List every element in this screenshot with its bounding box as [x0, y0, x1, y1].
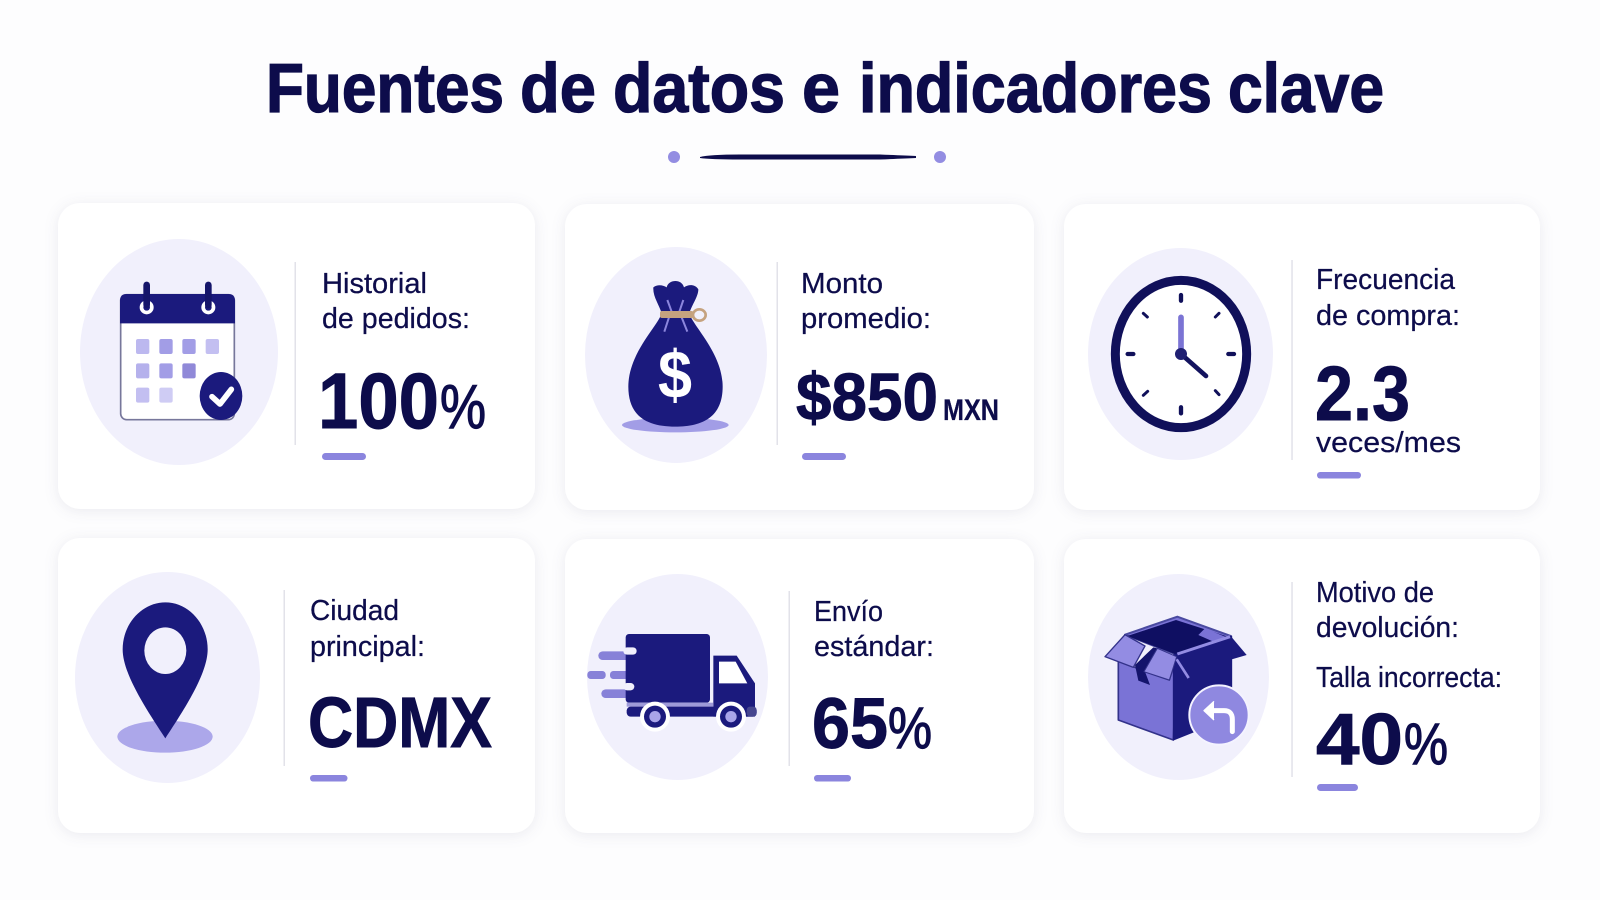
label: Ciudad	[310, 595, 399, 627]
icon: clock	[1088, 248, 1273, 460]
title divider	[668, 151, 946, 163]
panel: envío estándar	[565, 539, 1034, 833]
icon: return box	[1088, 574, 1269, 780]
icon: money bag: $	[658, 337, 692, 413]
label	[801, 268, 931, 335]
label: Frecuencia	[1316, 264, 1456, 296]
title: clave	[1228, 49, 1384, 127]
label: de pedidos:	[322, 303, 470, 335]
panel: frecuencia de compra	[1064, 204, 1540, 510]
panel: historial de pedidos	[58, 203, 535, 509]
value: 65%: 65	[812, 685, 888, 764]
panel: motivo de devolución	[1064, 539, 1540, 833]
label	[322, 268, 470, 335]
icon: location pin	[75, 572, 260, 783]
value: $850 MXN: $850	[796, 360, 938, 435]
icon: money bag	[585, 247, 767, 463]
value: 40%	[1316, 700, 1448, 780]
label	[310, 595, 425, 663]
title: de	[520, 49, 596, 127]
value: 2.3 veces/mes: veces/mes	[1316, 427, 1461, 459]
panel: ciudad principal	[58, 538, 535, 833]
label: principal:	[310, 631, 425, 663]
value: 65%	[812, 685, 932, 764]
value: $850 MXN: MXN	[943, 394, 999, 427]
label: de compra:	[1316, 300, 1460, 332]
label: promedio:	[801, 303, 931, 335]
icon: calendar	[80, 239, 278, 465]
label: estándar:	[814, 631, 934, 663]
panel: monto promedio	[565, 204, 1034, 510]
value: 40%: %	[1404, 712, 1448, 777]
title: e	[802, 49, 840, 127]
value: 65%: %	[888, 696, 932, 761]
label	[1316, 577, 1459, 644]
value: 100%: %	[440, 373, 486, 442]
label: Monto	[801, 268, 883, 300]
value: 100%: 100	[318, 356, 439, 445]
title: datos	[613, 49, 785, 127]
label	[1316, 264, 1460, 332]
value: 40%: 40	[1316, 700, 1403, 780]
sublabel: Talla incorrecta:	[1316, 662, 1502, 694]
label	[814, 596, 934, 663]
label: Envío	[814, 596, 883, 628]
label: Motivo de	[1316, 577, 1434, 609]
value: 2.3 veces/mes	[1315, 351, 1461, 459]
label: Historial	[322, 268, 427, 300]
value: CDMX: CDMX	[308, 684, 492, 763]
title: Fuentes	[266, 49, 504, 127]
value: 2.3 veces/mes: 2.3	[1315, 351, 1410, 437]
title: indicadores	[859, 49, 1212, 127]
label: devolución:	[1316, 612, 1459, 644]
icon: delivery truck	[587, 574, 768, 780]
